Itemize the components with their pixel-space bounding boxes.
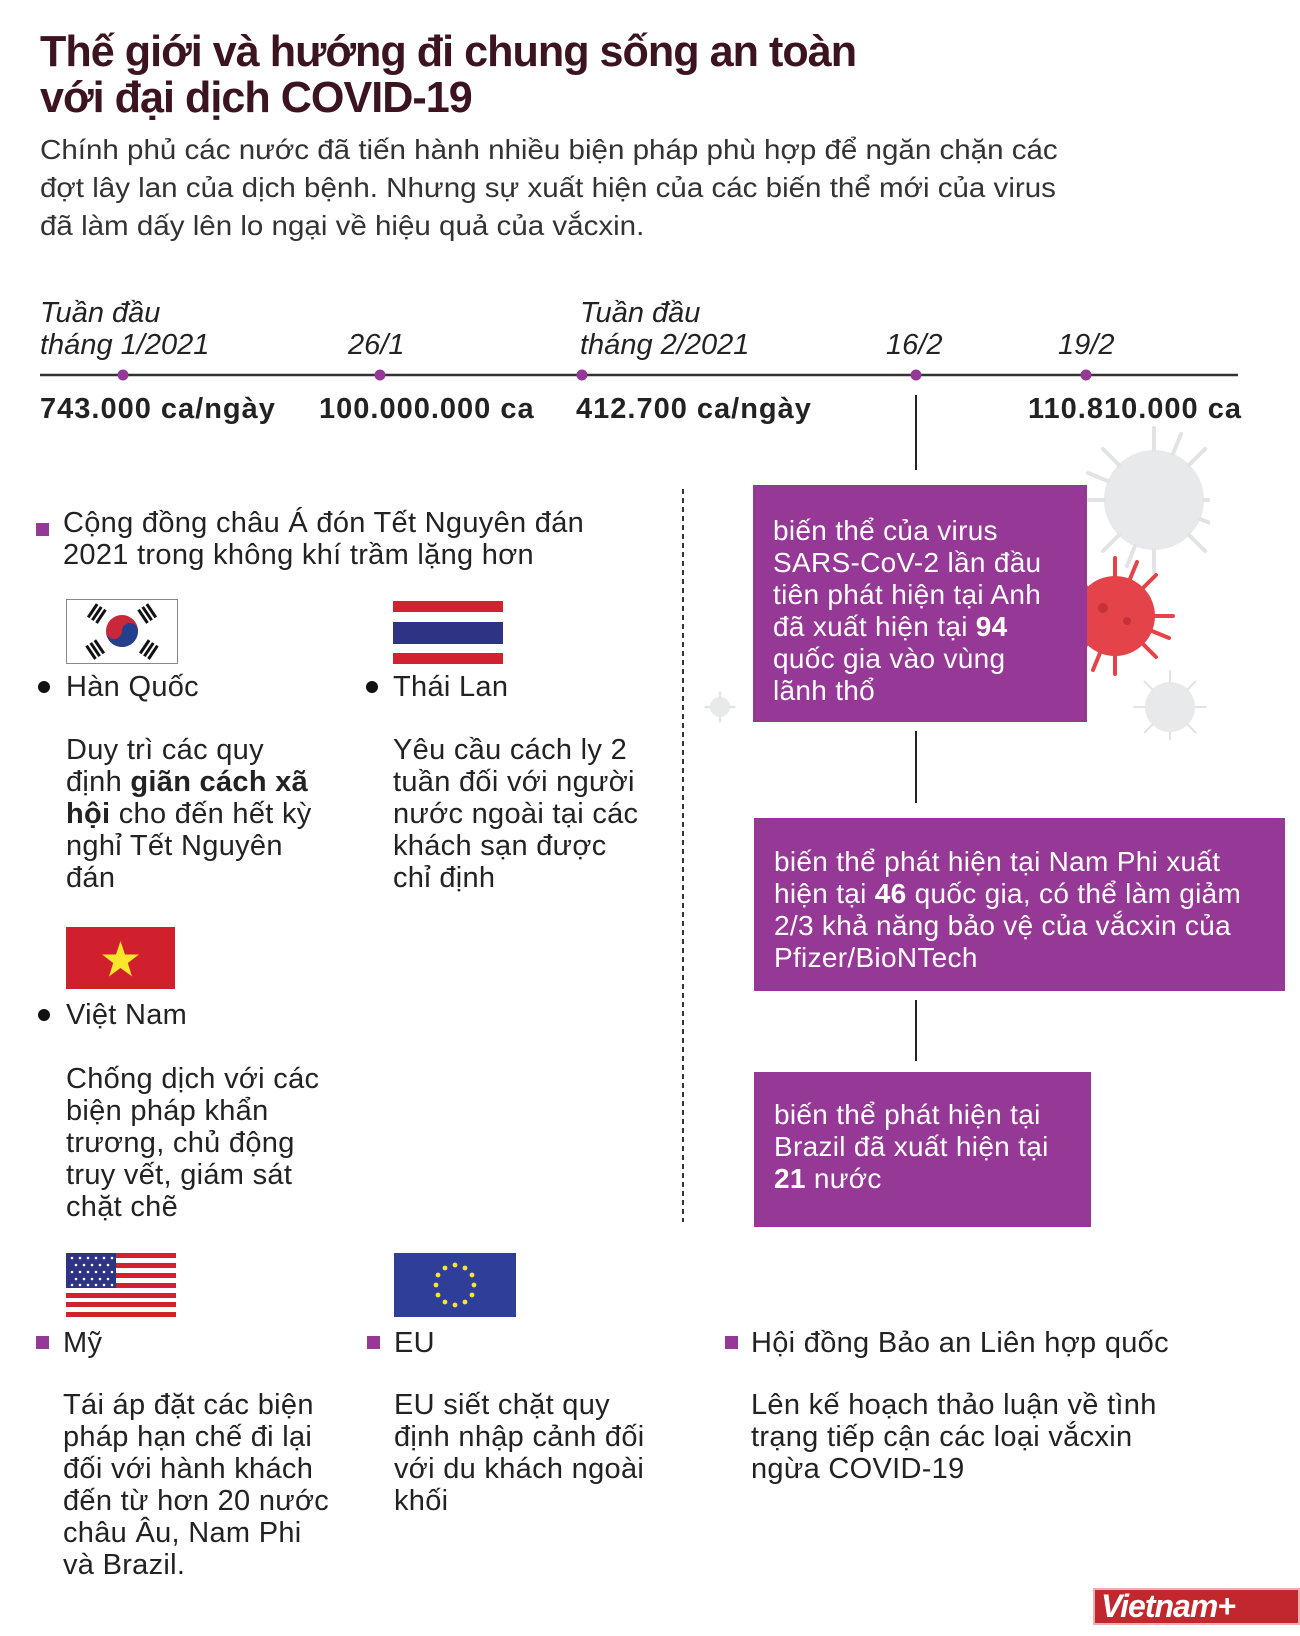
box: South Africa variant [754, 818, 1285, 991]
item: Korea: hội cho đến hết kỳ [66, 798, 312, 830]
item: USA: Tái áp đặt các biện [63, 1389, 314, 1421]
item: Vietnam: Việt Nam [66, 999, 187, 1031]
logo [1093, 1588, 1300, 1625]
item: EU [367, 1327, 644, 1517]
item: Thailand: Thái Lan [393, 671, 508, 703]
item: Thailand: khách sạn được [393, 830, 607, 862]
subtitle: Chính phủ các nước đã tiến hành nhiều biện pháp phù hợp để ngăn chặn các [40, 134, 1058, 165]
item: USA: châu Âu, Nam Phi [63, 1517, 302, 1549]
title [40, 27, 856, 122]
subtitle: đã làm dấy lên lo ngại về hiệu quả của vắcxin. [40, 210, 644, 241]
item: Vietnam: Chống dịch với các [66, 1063, 319, 1095]
item: Korea: định giãn cách xã [66, 766, 308, 798]
box: UK variant: quốc gia vào vùng [773, 643, 1005, 674]
item: EU: với du khách ngoài [394, 1453, 644, 1485]
item: Korea: Duy trì các quy [66, 734, 264, 766]
logo: Vietnam+ [1101, 1588, 1235, 1624]
item: Thailand: chỉ định [393, 862, 495, 894]
timeline axis with dots [40, 370, 1238, 380]
item: Korea: đán [66, 862, 115, 894]
timeline: 100.000.000 ca [319, 393, 535, 425]
item: UN Security Council: ngừa COVID-19 [751, 1453, 965, 1485]
timeline date labels [40, 297, 209, 361]
box: UK variant [753, 485, 1087, 722]
timeline: 16/2 [886, 329, 942, 361]
item: USA: pháp hạn chế đi lại [63, 1421, 312, 1453]
box: UK variant: SARS-CoV-2 lần đầu [773, 547, 1041, 578]
icon: EU flag [394, 1253, 516, 1317]
item: Korea: nghỉ Tết Nguyên [66, 830, 283, 862]
item: Thailand [366, 671, 638, 894]
item: Vietnam [38, 999, 319, 1223]
item: EU: khối [394, 1485, 448, 1517]
item: UN Security Council [725, 1327, 1169, 1485]
item: EU: EU siết chặt quy [394, 1389, 610, 1421]
box: UK variant: tiên phát hiện tại Anh [773, 579, 1041, 610]
item: USA: đến từ hơn 20 nước [63, 1485, 329, 1517]
item: EU: EU [394, 1327, 435, 1359]
item: Vietnam: biện pháp khẩn [66, 1095, 269, 1127]
box: South Africa variant: 2/3 khả năng bảo vệ của vắcxin của [774, 910, 1231, 941]
item: EU: định nhập cảnh đối [394, 1421, 644, 1453]
section heading: Asia [36, 507, 584, 571]
timeline: 19/2 [1058, 329, 1114, 361]
box: Brazil variant: biến thể phát hiện tại [774, 1099, 1041, 1130]
item: USA: và Brazil. [63, 1549, 185, 1581]
timeline [40, 297, 1242, 425]
box: South Africa variant: biến thể phát hiện tại Nam Phi xuất [774, 846, 1220, 877]
box: Brazil variant: 21 nước [774, 1163, 882, 1194]
timeline: Tuần đầu [580, 297, 700, 329]
item: Korea: Hàn Quốc [66, 671, 199, 703]
item: UN Security Council: Hội đồng Bảo an Liên hợp quốc [751, 1327, 1169, 1359]
item: Thailand: nước ngoài tại các [393, 798, 638, 830]
icon: Korea flag [66, 599, 178, 664]
item: Vietnam: truy vết, giám sát [66, 1159, 292, 1191]
box: UK variant: đã xuất hiện tại 94 [773, 611, 1008, 642]
timeline: 26/1 [348, 329, 404, 361]
timeline: 110.810.000 ca [1028, 393, 1242, 425]
item: USA: đối với hành khách [63, 1453, 313, 1485]
item: UN Security Council: Lên kế hoạch thảo luận về tình [751, 1389, 1157, 1421]
timeline values: 743.000 ca/ngày [40, 393, 276, 425]
subtitle: đợt lây lan của dịch bệnh. Nhưng sự xuất hiện của các biến thể mới của virus [40, 172, 1056, 203]
title: với đại dịch COVID-19 [40, 73, 472, 122]
box: Brazil variant [754, 1072, 1091, 1227]
item: UN Security Council: trạng tiếp cận các loại vắcxin [751, 1421, 1132, 1453]
title: Thế giới và hướng đi chung sống an toàn [40, 27, 856, 76]
box: South Africa variant: Pfizer/BioNTech [774, 942, 978, 973]
box: UK variant: lãnh thổ [773, 675, 875, 706]
item: Thailand: tuần đối với người [393, 766, 635, 798]
timeline: 412.700 ca/ngày [576, 393, 812, 425]
box: Brazil variant: Brazil đã xuất hiện tại [774, 1131, 1049, 1162]
box: South Africa variant: hiện tại 46 quốc gia, có thể làm giảm [774, 878, 1241, 909]
item: Korea [38, 671, 312, 894]
icon: Thailand flag [393, 601, 503, 664]
timeline date labels: Tuần đầu [40, 297, 160, 329]
timeline date labels: tháng 1/2021 [40, 329, 209, 361]
item: Vietnam: chặt chẽ [66, 1191, 178, 1223]
item: Vietnam: trương, chủ động [66, 1127, 295, 1159]
item: USA [36, 1327, 329, 1581]
section heading: Asia: Cộng đồng châu Á đón Tết Nguyên đán [63, 507, 584, 539]
item: USA: Mỹ [63, 1327, 102, 1359]
icon: viruses [704, 426, 1210, 740]
item: Thailand: Yêu cầu cách ly 2 [393, 734, 627, 766]
box: UK variant: biến thể của virus [773, 515, 998, 546]
timeline: tháng 2/2021 [580, 329, 749, 361]
icon: US flag [66, 1253, 176, 1317]
subtitle [40, 134, 1058, 241]
icon: Vietnam flag [66, 927, 175, 989]
section heading: Asia: 2021 trong không khí trầm lặng hơn [63, 539, 534, 571]
